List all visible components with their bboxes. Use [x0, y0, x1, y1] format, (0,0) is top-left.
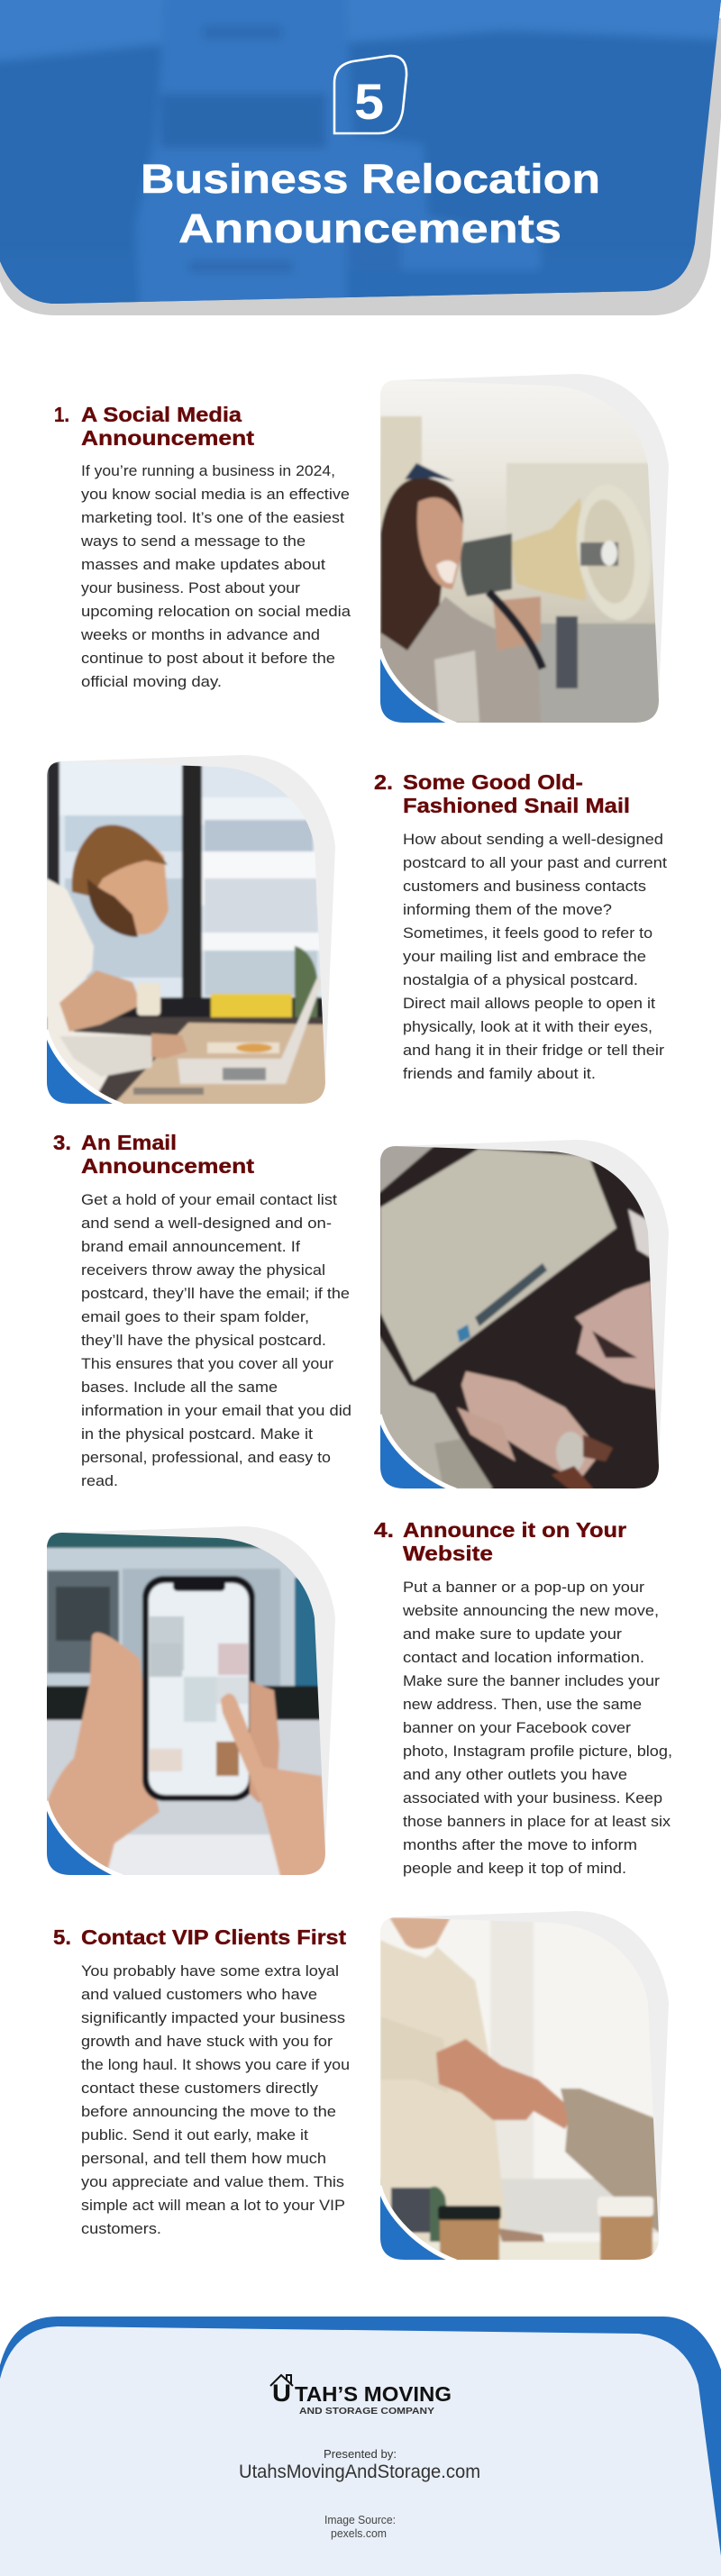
section 2 heading: Some Good Old- — [403, 770, 583, 794]
section 4 body: months after the move to inform — [403, 1836, 637, 1853]
logo: U — [272, 2380, 291, 2407]
section 2 body: informing them of the move? — [403, 901, 612, 918]
photo 2 blue corner — [46, 1030, 123, 1106]
section 4 text — [374, 1518, 672, 1877]
section 4 body: and any other outlets you have — [403, 1766, 627, 1783]
section 4 body: photo, Instagram profile picture, blog, — [403, 1743, 672, 1760]
section 1 body: you know social media is an effective — [81, 486, 350, 503]
section 2 body: your mailing list and embrace the — [403, 948, 646, 965]
section 3 body: brand email announcement. If — [81, 1238, 300, 1255]
header grey backing shape — [0, 18, 721, 315]
section 3 body — [81, 1191, 351, 1489]
section 2 body: friends and family about it. — [403, 1065, 596, 1082]
section 1 body: continue to post about it before the — [81, 650, 335, 667]
photo 3 blue corner — [379, 1415, 456, 1490]
title: Business Relocation — [141, 156, 600, 202]
title — [141, 156, 600, 251]
section 3 heading: An Email — [81, 1131, 177, 1154]
footer blue backing — [0, 2317, 721, 2576]
section 5 text — [53, 1925, 350, 2237]
section 5 body: public. Send it out early, make it — [81, 2126, 308, 2144]
section 4 heading: Website — [403, 1542, 493, 1565]
section 1 body: ways to send a message to the — [80, 532, 306, 550]
image source: pexels.com — [331, 2526, 387, 2540]
section 5 body: simple act will mean a lot to your VIP — [81, 2197, 345, 2214]
section 1 text — [54, 403, 351, 690]
section 2 body: How about sending a well-designed — [403, 831, 663, 848]
section 3 heading: 3. — [53, 1131, 71, 1154]
section 5 body: significantly impacted your business — [81, 2009, 345, 2026]
section 2 body — [403, 831, 667, 1082]
section 4 body — [402, 1579, 672, 1877]
section 5 body: contact these customers directly — [81, 2080, 319, 2097]
section 4 body: website announcing the new move, — [402, 1602, 659, 1619]
section 1 body: If you’re running a business in 2024, — [81, 462, 335, 479]
title: Announcements — [178, 205, 561, 251]
badge: number 5: 5 — [354, 73, 384, 130]
section 1 heading: A Social Media — [81, 403, 242, 426]
section 2 heading — [374, 770, 630, 817]
header blue truck photo — [0, 0, 721, 315]
section 1 heading: 1. — [54, 403, 69, 426]
section 1 body: upcoming relocation on social media — [81, 603, 351, 620]
section 4 body: Put a banner or a pop-up on your — [403, 1579, 644, 1596]
photo 1 blue corner — [379, 649, 456, 724]
section 1 body: marketing tool. It’s one of the easiest — [81, 509, 344, 526]
photo 4: phone in hands — [42, 1526, 335, 1880]
section 1 heading: Announcement — [81, 426, 254, 450]
section 3 body: and send a well-designed and on- — [81, 1215, 332, 1232]
section 2 text — [374, 770, 667, 1082]
section 1 body: official moving day. — [81, 673, 222, 690]
section 5 body: growth and have stuck with you for — [81, 2033, 333, 2050]
section 3 body: read. — [81, 1472, 118, 1489]
footer panel — [0, 2317, 721, 2576]
badge: number 5 — [334, 56, 406, 133]
section 1 body: masses and make updates about — [81, 556, 325, 573]
presented by: UtahsMovingAndStorage.com — [239, 2462, 480, 2482]
section 4 body: associated with your business. Keep — [403, 1789, 662, 1807]
section 3 body: in the physical postcard. Make it — [81, 1425, 313, 1443]
section 4 body: banner on your Facebook cover — [403, 1719, 631, 1736]
section 4 body: new address. Then, use the same — [403, 1696, 642, 1713]
photo 2: man with coffee at laptop — [42, 755, 335, 1108]
section 2 body: Direct mail allows people to open it — [403, 995, 655, 1012]
section 3 heading: Announcement — [81, 1154, 254, 1178]
section 4 body: people and keep it top of mind. — [403, 1860, 626, 1877]
image source — [324, 2513, 396, 2540]
section 5 body: customers. — [81, 2220, 161, 2237]
section 1 body: your business. Post about your — [81, 579, 300, 596]
footer pale panel — [0, 2326, 721, 2576]
section 3 body: Get a hold of your email contact list — [81, 1191, 337, 1208]
section 3 body: postcard, they’ll have the email; if the — [81, 1285, 350, 1302]
section 4 body: and make sure to update your — [403, 1625, 622, 1643]
section 3 body: receivers throw away the physical — [81, 1261, 325, 1279]
section 4 body: those banners in place for at least six — [403, 1813, 671, 1830]
section 2 body: physically, look at it with their eyes, — [403, 1018, 653, 1035]
logo house roof — [270, 2375, 293, 2386]
section 1 body: weeks or months in advance and — [80, 626, 320, 643]
logo: TAH’S MOVING — [295, 2382, 452, 2406]
presented by — [239, 2447, 480, 2482]
section 2 heading: 2. — [374, 770, 393, 794]
section 2 body: Sometimes, it feels good to refer to — [403, 924, 653, 942]
section 2 body: postcard to all your past and current — [403, 854, 667, 871]
logo — [270, 2375, 452, 2417]
section 3 body: email goes to their spam folder, — [81, 1308, 309, 1325]
section 5 body — [81, 1962, 350, 2237]
section 2 body: customers and business contacts — [403, 878, 646, 895]
section 5 body: and valued customers who have — [81, 1986, 317, 2003]
photo 1: woman with megaphone — [376, 374, 669, 727]
section 4 heading: 4. — [374, 1518, 394, 1542]
section 3 heading — [53, 1131, 254, 1178]
section 4 heading: Announce it on Your — [403, 1518, 626, 1542]
section 5 body: personal, and tell them how much — [81, 2150, 326, 2167]
section 5 body: You probably have some extra loyal — [81, 1962, 339, 1980]
presented by: Presented by: — [324, 2447, 397, 2461]
header banner — [0, 0, 721, 315]
section 3 body: they’ll have the physical postcard. — [81, 1332, 326, 1349]
photo 5: handshake — [376, 1911, 669, 2271]
section 2 body: and hang it in their fridge or tell their — [403, 1042, 664, 1059]
section 4 body: Make sure the banner includes your — [403, 1672, 660, 1689]
section 5 body: before announcing the move to the — [81, 2103, 336, 2120]
section 3 text — [53, 1131, 351, 1489]
section 3 body: information in your email that you did — [81, 1402, 351, 1419]
section 3 body: bases. Include all the same — [81, 1379, 278, 1396]
logo: AND STORAGE COMPANY — [299, 2407, 434, 2417]
image source: Image Source: — [324, 2513, 396, 2526]
section 3 body: personal, professional, and easy to — [81, 1449, 331, 1466]
section 5 body: you appreciate and value them. This — [81, 2173, 344, 2190]
section 3 body: This ensures that you cover all your — [81, 1355, 333, 1372]
section 2 heading: Fashioned Snail Mail — [403, 794, 630, 817]
section 5 heading: 5. — [53, 1925, 71, 1949]
photo 3: hands typing on laptop — [376, 1140, 669, 1493]
section 5 heading: Contact VIP Clients First — [81, 1925, 346, 1949]
section 2 body: nostalgia of a physical postcard. — [403, 971, 638, 988]
section 4 body: contact and location information. — [403, 1649, 644, 1666]
photo 4 blue corner — [46, 1801, 123, 1877]
section 5 body: the long haul. It shows you care if you — [81, 2056, 350, 2073]
section 1 body — [80, 462, 351, 690]
section 4 heading — [374, 1518, 626, 1565]
photo 5 blue corner — [379, 2186, 456, 2262]
section 1 heading — [54, 403, 254, 450]
